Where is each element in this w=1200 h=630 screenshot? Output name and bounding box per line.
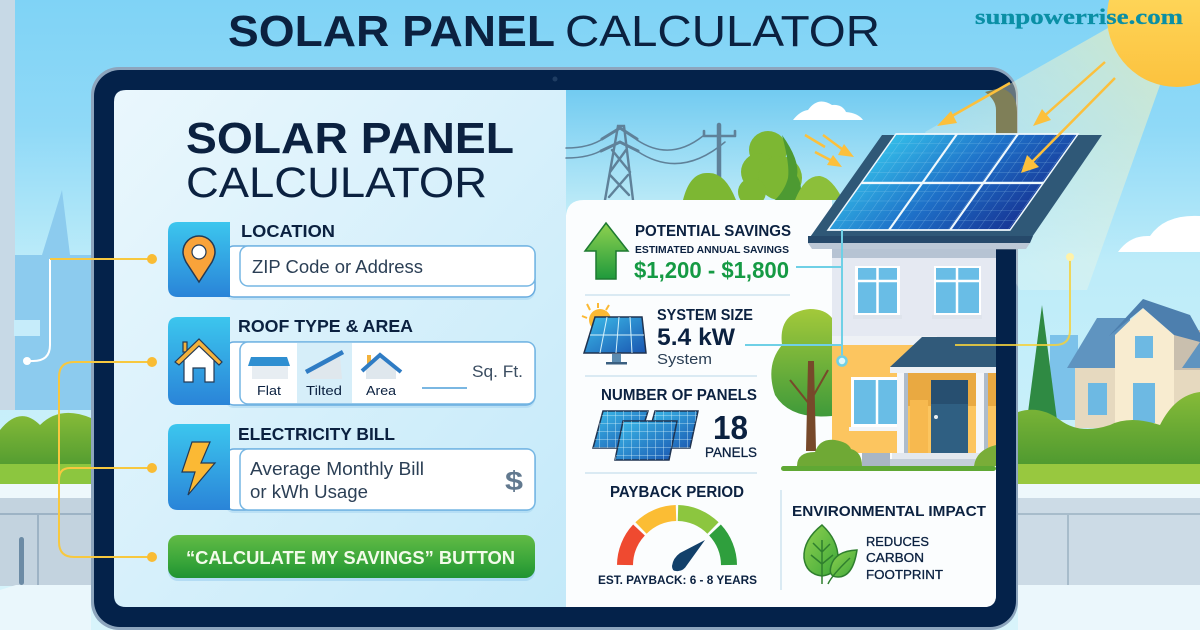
location label: LOCATION [241,221,335,241]
roof label: ROOF TYPE & AREA [238,316,413,336]
roof with solar panels [808,134,1102,249]
yellow connector to house [955,253,1074,345]
electricity input [240,449,535,510]
option: flat: Flat [257,384,282,398]
environmental impact section: ENVIRONMENTAL IMPACT [792,503,986,520]
payback period section: EST. PAYBACK: 6 - 8 YEARS [598,573,757,587]
tree by house [771,309,862,466]
option: area: Area [366,384,396,398]
panel: location [168,221,535,300]
location input: ZIP Code or Address [252,257,423,277]
roof input [240,342,535,404]
inner heading: CALCULATOR [186,159,487,207]
gauge [625,513,729,571]
title: SOLAR PANEL [228,7,555,56]
electricity label: ELECTRICITY BILL [238,424,395,444]
icon: green up arrow [585,223,628,279]
environmental impact section: CARBON [866,550,924,565]
panel: roof type and area [168,316,535,408]
trees behind the card [683,131,843,206]
title: CALCULATOR [565,7,880,56]
screen right panel [566,90,996,607]
environmental impact section [792,503,986,584]
electricity input: or kWh Usage [250,482,368,502]
white results card [566,200,996,607]
number of panels section [593,387,757,460]
sun rays [925,28,1160,290]
location input [240,246,535,286]
house [781,243,996,471]
system size section: System [657,351,712,368]
website label: sunpowerrise.com [975,4,1183,29]
electricity icon box [168,424,230,510]
calculate button [168,535,535,581]
power lines illustration [566,125,735,200]
tablet frame [91,67,1018,630]
potential savings section: ESTIMATED ANNUAL SAVINGS [635,244,789,256]
option: tilted: Tilted [306,384,342,398]
icon: lightning bolt [182,442,215,495]
system size section: 5.4 kW [657,324,735,351]
left connectors [23,254,157,562]
calculate button: “CALCULATE MY SAVINGS” BUTTON [186,548,515,568]
potential savings section: POTENTIAL SAVINGS [635,223,791,240]
payback period section: PAYBACK PERIOD [610,484,744,501]
option: tilted [306,352,343,398]
solar array [828,134,1078,230]
payback period section [598,484,757,587]
potential savings section [585,223,791,283]
system size section: SYSTEM SIZE [657,307,753,324]
number of panels section: 18 [713,409,748,446]
icon: leaves [804,525,857,584]
sun arrows [805,62,1115,173]
right tablet bezel [996,250,1016,595]
inner heading: SOLAR PANEL [186,114,514,163]
option: flat [248,357,290,398]
cyan connectors [745,230,846,366]
tablet right bezel top behind rays [985,88,1017,134]
system size section [582,303,753,368]
screen left panel [114,90,566,607]
electricity input: Average Monthly Bill [250,459,424,479]
icon: three solar panels [593,411,698,460]
icon: house [175,339,222,382]
square feet unit: Sq. Ft. [472,362,523,381]
potential savings section: $1,200 - $1,800 [634,257,789,283]
number of panels section: NUMBER OF PANELS [601,387,757,404]
number of panels section: PANELS [705,445,757,460]
option: area [362,355,401,398]
title [228,7,880,56]
panel: electricity bill [168,424,535,513]
inner heading [186,114,514,207]
environmental impact section: FOOTPRINT [866,567,943,582]
location icon box [168,222,230,297]
electricity input: $ [505,466,523,496]
icon: map pin [183,236,215,282]
roof icon box [168,317,230,405]
icon: solar panel on stand [582,303,646,364]
sun [1107,0,1200,87]
environmental impact section: REDUCES [866,534,929,549]
